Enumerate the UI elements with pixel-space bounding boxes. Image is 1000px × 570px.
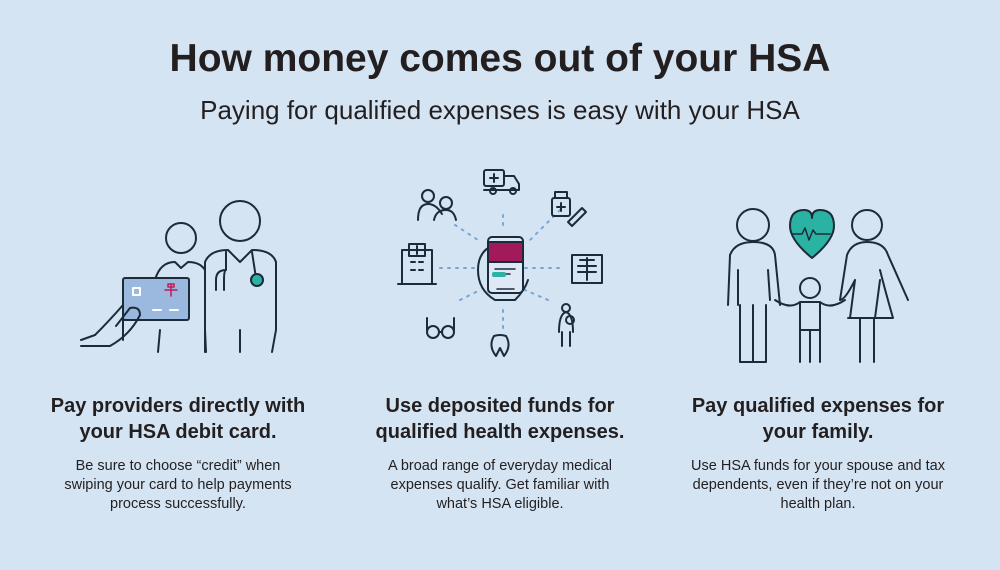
column: debit card: Pay providers directly with [51,395,305,417]
title: How money comes out of your HSA [170,37,830,80]
subtitle: Paying for qualified expenses is easy with your HSA [200,95,800,125]
column: deposited funds: Use deposited funds for [386,395,614,417]
column: deposited funds [376,395,624,512]
column: family: Use HSA funds for your spouse and tax [691,458,945,474]
column: deposited funds: what’s HSA eligible. [436,496,564,512]
column: deposited funds: A broad range of everyday medical [388,458,612,474]
column: debit card: Be sure to choose “credit” when [76,458,280,474]
icon: family [728,209,908,362]
icon: card and providers [81,201,276,352]
column: family: your family. [763,421,873,443]
column: debit card: process successfully. [110,496,246,512]
column: deposited funds: expenses qualify. Get familiar with [391,477,609,493]
column: family: health plan. [780,496,855,512]
column: family: Pay qualified expenses for [692,395,944,417]
column: debit card: swiping your card to help payments [64,477,292,493]
column: debit card: your HSA debit card. [79,421,277,443]
column: deposited funds: qualified health expenses. [376,421,624,443]
column: family: dependents, even if they’re not on your [693,477,943,493]
icon: phone with medical services [398,170,602,356]
column: debit card [51,395,305,512]
column: family [691,395,945,512]
